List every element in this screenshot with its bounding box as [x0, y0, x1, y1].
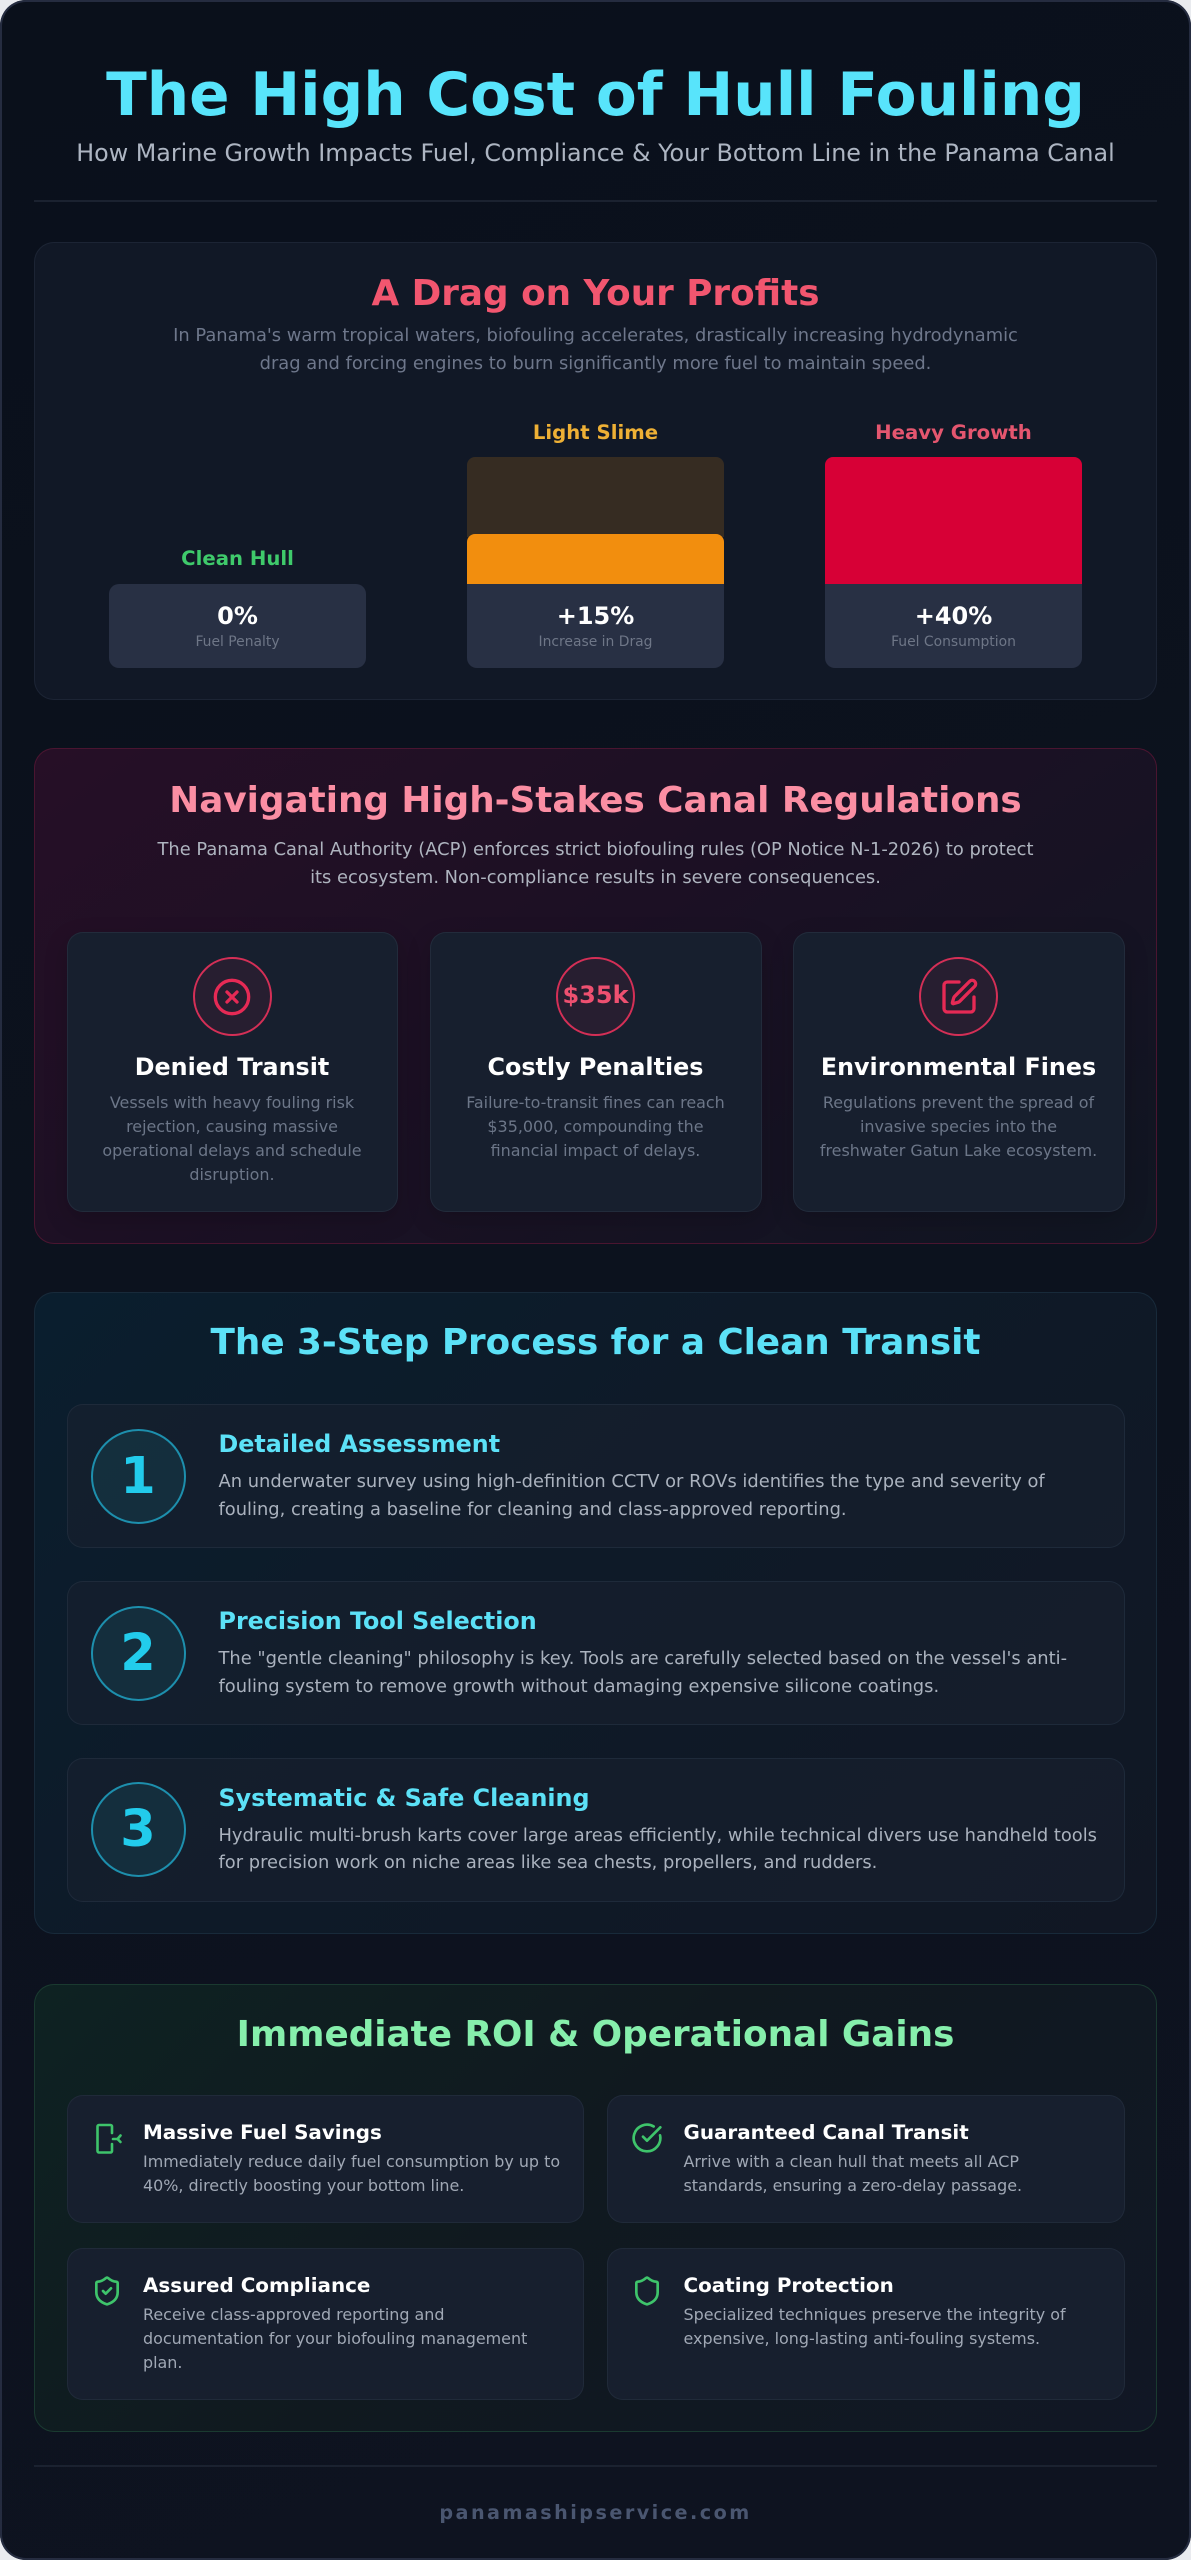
step text [218, 1648, 1067, 1696]
step text: An underwater survey using high-definition CCTV or ROVs identifies the type and severity of [218, 1471, 1045, 1492]
text: drag intro: In Panama's warm tropical waters, biofouling accelerates, drastically increasing hydrodynamic [173, 324, 1018, 346]
card text: financial impact of delays. [491, 1141, 700, 1160]
number badge 2: 2 [120, 1624, 156, 1683]
step 3 [66, 1758, 1124, 1902]
card title: Guaranteed Canal Transit [684, 2121, 969, 2144]
step text: Hydraulic multi-brush karts cover large areas efficiently, while technical divers use handheld tools [218, 1824, 1097, 1846]
bar fill red [825, 457, 1082, 584]
step 1 [66, 1404, 1124, 1548]
card text [684, 2305, 1066, 2348]
card title: Denied Transit [135, 1053, 329, 1081]
bar: clean hull [109, 546, 366, 668]
card: fuel savings [66, 2095, 584, 2223]
stat: +40% fuel consumption: +40% [915, 602, 992, 630]
card: canal transit [607, 2095, 1124, 2223]
card text [820, 1093, 1097, 1160]
card: environmental fines [793, 932, 1124, 1212]
card text: plan. [143, 2353, 182, 2372]
card: costly penalties [430, 932, 762, 1212]
stat: 0% fuel penalty: Fuel Penalty [195, 634, 280, 650]
label: clean hull: Clean Hull [181, 546, 294, 570]
card text [102, 1093, 362, 1184]
card: denied transit [66, 932, 398, 1212]
stat: +40% fuel consumption [825, 584, 1082, 668]
bar fill orange [467, 534, 724, 584]
card text: 40%, directly boosting your bottom line. [143, 2176, 464, 2195]
card text: operational delays and schedule [102, 1141, 362, 1160]
step 2 [66, 1581, 1124, 1725]
step text [218, 1471, 1045, 1520]
icon: pen square [919, 957, 998, 1036]
card text [466, 1093, 725, 1160]
text: regulations intro [157, 839, 1034, 888]
stat: +15% increase in drag [467, 584, 724, 668]
bar: heavy growth [825, 420, 1082, 668]
step text: for precision work on niche areas like sea chests, propellers, and rudders. [218, 1852, 877, 1873]
card title: Massive Fuel Savings [143, 2121, 382, 2144]
icon: check circle [632, 2123, 662, 2153]
card text: expensive, long-lasting anti-fouling systems. [684, 2329, 1040, 2348]
bar track [467, 457, 724, 537]
step title: Detailed Assessment [218, 1430, 500, 1458]
card text: Failure-to-transit fines can reach [466, 1093, 725, 1112]
card text: Receive class-approved reporting and [143, 2305, 445, 2324]
card text [143, 2305, 527, 2372]
heading: drag: A Drag on Your Profits [372, 273, 820, 314]
card: coating protection [607, 2248, 1124, 2400]
icon: fuel bracket [96, 2124, 122, 2154]
card text: documentation for your biofouling management [143, 2329, 527, 2348]
step title: Precision Tool Selection [218, 1607, 537, 1635]
panel: a drag on your profits [34, 242, 1157, 700]
stat: +15% increase in drag: Increase in Drag [538, 634, 652, 650]
stat: +15% increase in drag: +15% [557, 602, 634, 630]
card text: Arrive with a clean hull that meets all ACP [684, 2152, 1019, 2171]
card text: freshwater Gatun Lake ecosystem. [820, 1141, 1097, 1160]
icon: $35k badge [556, 957, 635, 1036]
label: heavy growth: Heavy Growth [875, 420, 1032, 444]
card title: Environmental Fines [821, 1053, 1096, 1081]
title: The High Cost of Hull Fouling [106, 61, 1085, 130]
card title: Costly Penalties [488, 1053, 703, 1081]
text: regulations intro: its ecosystem. Non-compliance results in severe consequences. [310, 867, 881, 888]
card text: standards, ensuring a zero-delay passage. [684, 2176, 1022, 2195]
card text: rejection, causing massive [126, 1117, 338, 1136]
label: light slime: Light Slime [533, 420, 658, 444]
step title: Systematic & Safe Cleaning [218, 1784, 590, 1812]
text: regulations intro: The Panama Canal Authority (ACP) enforces strict biofouling rules (OP Notice N-1-2026) to protect [157, 839, 1034, 860]
stat: +40% fuel consumption: Fuel Consumption [891, 634, 1016, 650]
step text: fouling, creating a baseline for cleaning and class-approved reporting. [218, 1498, 847, 1520]
step text: The "gentle cleaning" philosophy is key. Tools are carefully selected based on the vessel's anti- [218, 1648, 1067, 1669]
step text: fouling system to remove growth without damaging expensive silicone coatings. [218, 1676, 939, 1696]
icon: shield [635, 2276, 659, 2306]
card text: $35,000, compounding the [487, 1117, 704, 1136]
card text [143, 2152, 560, 2195]
heading: ROI: Immediate ROI & Operational Gains [237, 2014, 954, 2055]
number badge 2 [90, 1606, 186, 1701]
heading: process: The 3-Step Process for a Clean Transit [210, 1322, 980, 1363]
card: compliance [66, 2248, 584, 2400]
footer website: panamashipservice.com [439, 2501, 752, 2524]
card title: Assured Compliance [143, 2274, 370, 2297]
subtitle: How Marine Growth Impacts Fuel, Compliance & Your Bottom Line in the Panama Canal [76, 138, 1115, 166]
stat: 0% fuel penalty [109, 584, 366, 668]
bar: light slime [467, 420, 724, 668]
heading: regulations: Navigating High-Stakes Canal Regulations [169, 780, 1022, 821]
icon: $35k badge: $35k [562, 981, 629, 1009]
stat: 0% fuel penalty: 0% [217, 602, 258, 630]
card title: Coating Protection [684, 2274, 894, 2297]
panel: canal regulations [34, 748, 1157, 1244]
card text: Immediately reduce daily fuel consumption by up to [143, 2152, 560, 2171]
card text: Vessels with heavy fouling risk [110, 1093, 354, 1112]
number badge 1: 1 [120, 1447, 156, 1506]
panel: 3-step process [34, 1292, 1157, 1934]
number badge 3 [90, 1782, 186, 1877]
number badge 3: 3 [120, 1800, 156, 1859]
text: drag intro: drag and forcing engines to burn significantly more fuel to maintain speed. [260, 352, 931, 374]
panel: ROI gains [34, 1984, 1157, 2432]
card text: Regulations prevent the spread of [823, 1093, 1094, 1112]
card text [684, 2152, 1022, 2195]
icon: x circle [192, 957, 272, 1036]
icon: shield check [95, 2276, 119, 2306]
card text: disruption. [189, 1165, 275, 1184]
card text: invasive species into the [860, 1117, 1057, 1136]
step text [218, 1824, 1097, 1873]
number badge 1 [90, 1429, 186, 1524]
card text: Specialized techniques preserve the integrity of [684, 2305, 1066, 2324]
text: drag intro [173, 324, 1018, 374]
